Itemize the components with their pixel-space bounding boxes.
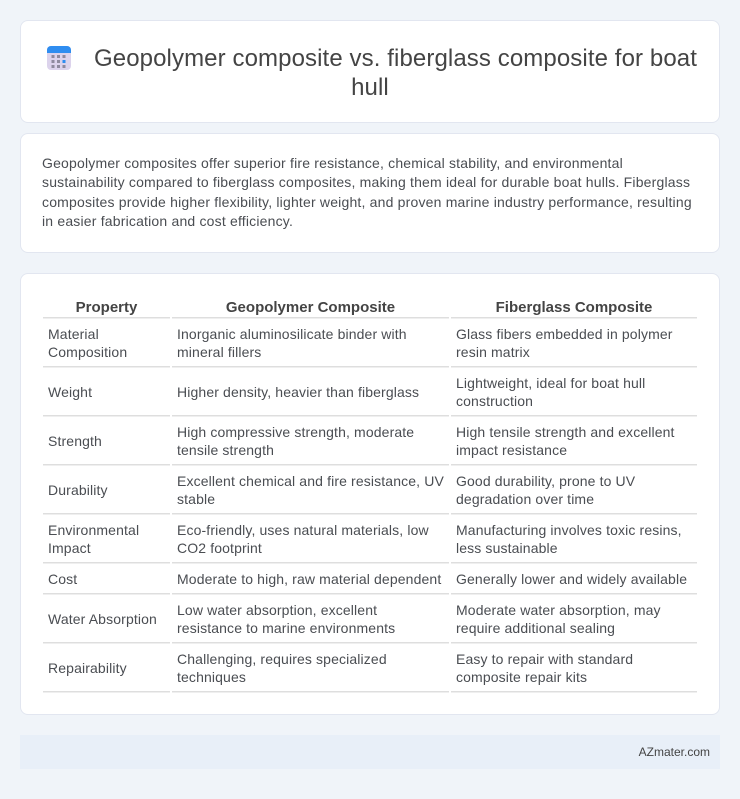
row: environmental impact: Impact [48, 540, 91, 556]
row: repairability: composite repair kits [456, 669, 587, 685]
summary text: in easier fabrication and cost efficiency. [42, 213, 293, 229]
panel: header [20, 20, 720, 123]
row: environmental impact: less sustainable [456, 540, 558, 556]
row: durability: degradation over time [456, 491, 594, 507]
row: repairability: techniques [177, 669, 246, 685]
row: strength: Strength [48, 433, 102, 449]
row: material composition: Glass fibers embedded in polymer [456, 326, 673, 342]
row: material composition [48, 326, 673, 360]
panel: comparison table [20, 273, 720, 715]
row: weight: Weight [48, 384, 92, 400]
row: material composition: Inorganic aluminosilicate binder with [177, 326, 407, 342]
panel: summary [20, 133, 720, 253]
row: material composition: Composition [48, 344, 127, 360]
row: repairability: Repairability [48, 660, 127, 676]
row: durability: Excellent chemical and fire resistance, UV [177, 473, 444, 489]
title: hull [351, 74, 389, 101]
summary text [42, 155, 692, 229]
icon: calendar [47, 46, 71, 70]
title [94, 45, 697, 101]
row: strength: High compressive strength, moderate [177, 424, 414, 440]
row: water absorption: Water Absorption [48, 611, 157, 627]
footer credit: AZmater.com [639, 745, 710, 759]
row: durability: Durability [48, 482, 108, 498]
row: strength [48, 424, 675, 458]
title: Geopolymer composite vs. fiberglass composite for boat [94, 45, 697, 72]
row: environmental impact: Manufacturing involves toxic resins, [456, 522, 682, 538]
row: water absorption: resistance to marine environments [177, 620, 395, 636]
row: weight: construction [456, 393, 533, 409]
row: repairability [48, 651, 633, 685]
row: environmental impact: Eco-friendly, uses natural materials, low [177, 522, 429, 538]
column heading: fiberglass: Fiberglass Composite [496, 299, 652, 316]
summary text: composites provide higher flexibility, lighter weight, and proven marine industry performance, resulting [42, 194, 692, 210]
row: strength: High tensile strength and excellent [456, 424, 675, 440]
column heading: property: Property [76, 299, 137, 316]
row: strength: impact resistance [456, 442, 567, 458]
row: cost: Cost [48, 571, 77, 587]
row: water absorption [48, 602, 661, 636]
row: cost: Generally lower and widely available [456, 571, 687, 587]
row: weight: Lightweight, ideal for boat hull [456, 375, 645, 391]
row: cost [48, 571, 687, 587]
summary text: Geopolymer composites offer superior fire resistance, chemical stability, and environmental [42, 155, 623, 171]
row: repairability: Easy to repair with standard [456, 651, 633, 667]
row: water absorption: Moderate water absorption, may [456, 602, 661, 618]
column heading: geopolymer: Geopolymer Composite [226, 299, 395, 316]
row: durability [48, 473, 635, 507]
row: water absorption: Low water absorption, excellent [177, 602, 377, 618]
row: water absorption: require additional sealing [456, 620, 615, 636]
row: environmental impact [48, 522, 682, 556]
footer [20, 735, 720, 769]
row: environmental impact: Environmental [48, 522, 139, 538]
row: cost: Moderate to high, raw material dependent [177, 571, 441, 587]
row: repairability: Challenging, requires specialized [177, 651, 387, 667]
summary text: sustainability compared to fiberglass composites, making them ideal for durable boat hulls. Fiberglass [42, 174, 690, 190]
row: environmental impact: CO2 footprint [177, 540, 262, 556]
row: durability: Good durability, prone to UV [456, 473, 635, 489]
row: material composition: Material [48, 326, 99, 342]
row: material composition: mineral fillers [177, 344, 261, 360]
row: weight: Higher density, heavier than fiberglass [177, 384, 419, 400]
row: weight [48, 375, 645, 409]
row: durability: stable [177, 491, 215, 507]
row: material composition: resin matrix [456, 344, 530, 360]
row: strength: tensile strength [177, 442, 274, 458]
